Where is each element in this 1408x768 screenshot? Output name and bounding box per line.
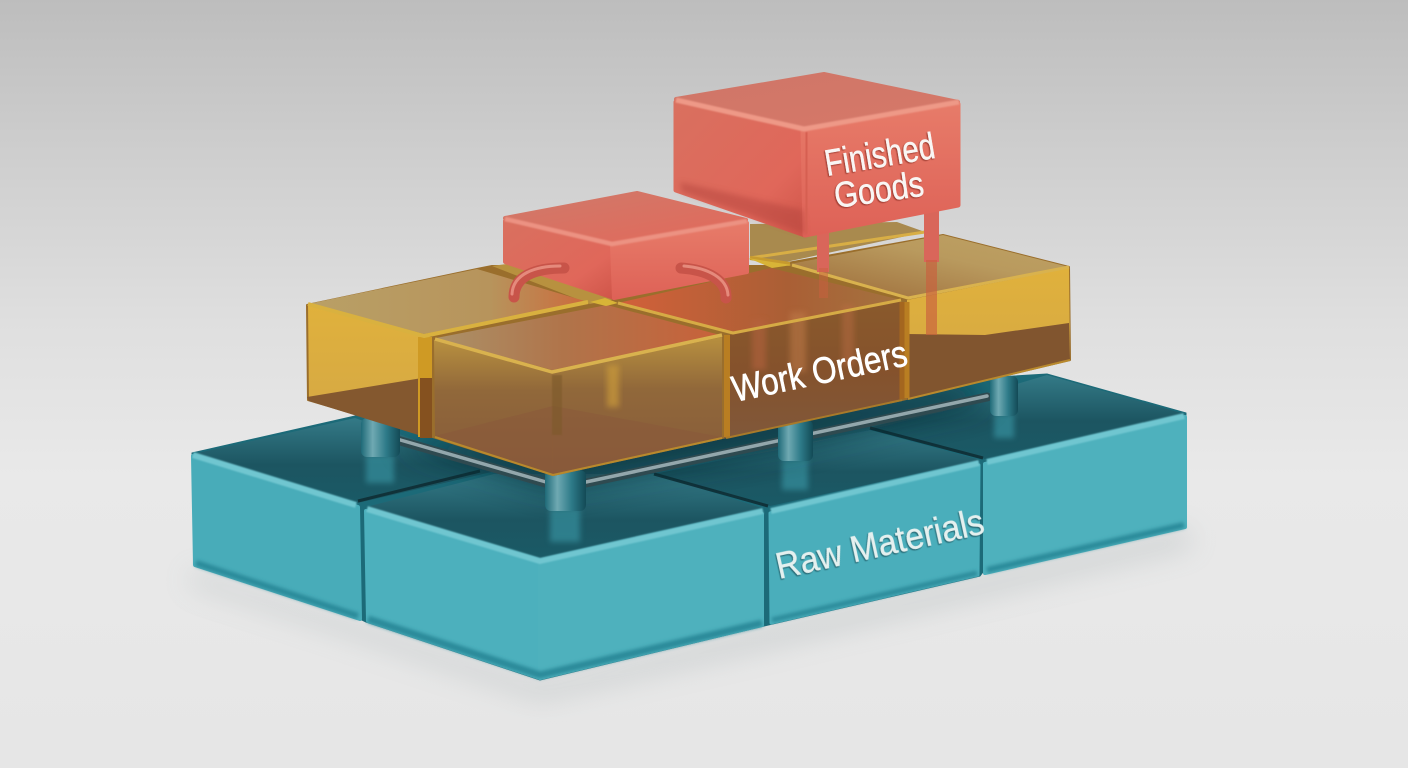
label: finished goods <box>822 125 938 216</box>
block: teal raw materials front <box>654 430 980 623</box>
pillar reflections <box>366 414 1014 542</box>
ground shadow <box>188 530 1192 698</box>
label: raw materials: Raw Materials <box>772 501 988 587</box>
label: finished goods: Goods <box>831 163 926 216</box>
icon: left hook connector <box>512 266 564 297</box>
tier: raw materials base blocks <box>192 374 1186 680</box>
support pillars and rods <box>361 376 1018 511</box>
block: amber back <box>492 222 925 304</box>
block: small red box <box>505 193 747 298</box>
block: finished goods <box>676 74 959 235</box>
pillar left <box>361 418 400 457</box>
label: finished goods: Finished <box>822 125 938 184</box>
pillar middle <box>778 420 813 461</box>
legs under finished goods block <box>817 210 939 335</box>
gold joints <box>590 258 792 306</box>
seams between teal blocks <box>358 428 983 506</box>
block: teal back left <box>193 418 500 619</box>
label: work orders: Work Orders <box>728 333 911 410</box>
block: amber left <box>307 269 588 438</box>
pillar front <box>545 470 586 511</box>
block: teal large front <box>366 474 763 678</box>
shadow under amber tier <box>395 385 990 490</box>
block: amber front <box>434 305 722 475</box>
block: teal back right <box>870 375 1185 573</box>
tier: finished goods red blocks <box>505 74 959 335</box>
block: amber right <box>790 235 1070 399</box>
icon: right hook connector <box>681 266 728 298</box>
tier: work orders amber glass blocks <box>307 222 1070 475</box>
amber underlay <box>307 235 1070 475</box>
pillar right <box>990 376 1018 416</box>
teal underlay <box>192 374 1186 680</box>
rods <box>390 396 987 483</box>
block: amber center <box>618 268 902 438</box>
